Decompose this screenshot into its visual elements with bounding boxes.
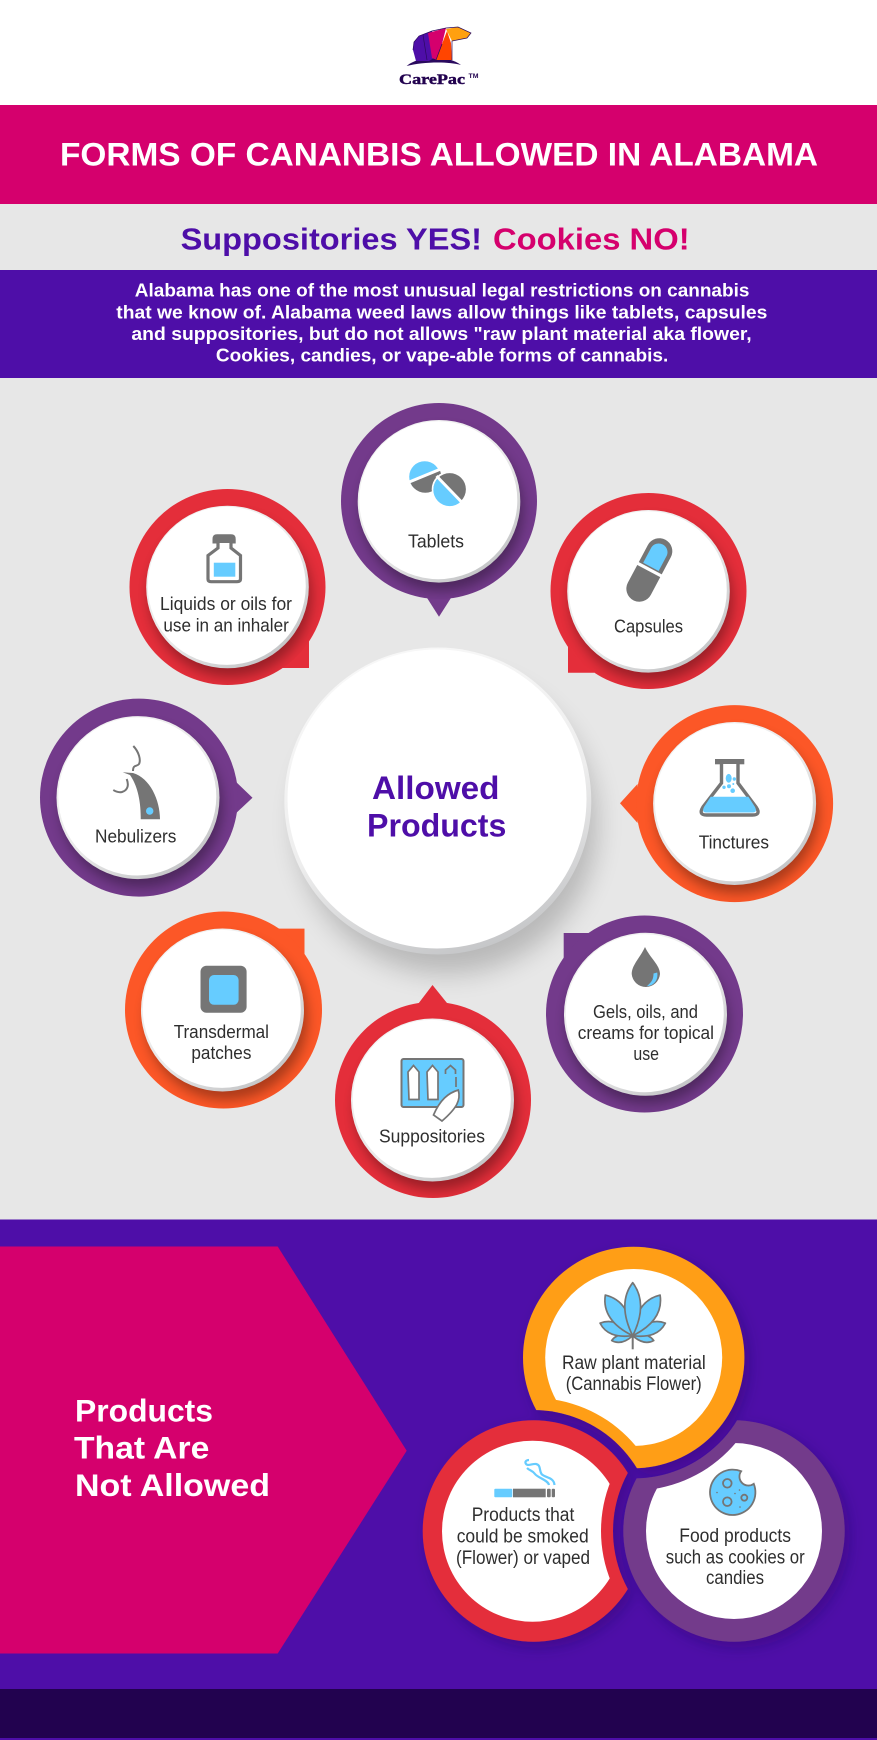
label: smoked or vaped: (Flower) or vaped <box>456 1548 590 1569</box>
label: smoked or vaped <box>456 1505 590 1569</box>
icon: bottle <box>208 534 240 582</box>
center circle: allowed products: Products <box>367 808 506 844</box>
intro paragraph: and suppositories, but do not allows "raw plant material aka flower, <box>131 323 752 344</box>
intro paragraph: that we know of. Alabama weed laws allow things like tablets, capsules <box>116 302 767 323</box>
arrow banner: products that are not allowed: Not Allowed <box>75 1467 270 1503</box>
center circle: allowed products: Allowed <box>372 770 500 806</box>
panel: allowed products background <box>0 378 877 1220</box>
badge: transdermal patches: Transdermal <box>174 1021 269 1042</box>
badge: suppositories <box>335 985 531 1198</box>
icon: cannabis leaf <box>598 1283 668 1349</box>
panel: not allowed background <box>0 1220 877 1690</box>
badge: nebulizers <box>40 699 252 897</box>
title banner <box>0 105 877 204</box>
badge: liquids or oils <box>130 489 326 685</box>
label: food products: candies <box>706 1568 764 1589</box>
icon: cookie <box>710 1470 755 1515</box>
label: raw plant material: Raw plant material <box>562 1353 706 1374</box>
badge: transdermal patches: patches <box>191 1042 251 1063</box>
badge: gels, oils, creams <box>546 916 743 1112</box>
badge: liquids or oils: use in an inhaler <box>163 615 289 636</box>
label: raw plant material <box>562 1353 706 1395</box>
badge: tinctures: Tinctures <box>699 832 769 853</box>
background: white logo band <box>0 0 877 105</box>
label: smoked or vaped: Products that <box>472 1505 575 1526</box>
circle: smoked or vaped <box>423 1420 644 1642</box>
icon: smoking cigarette <box>494 1460 555 1497</box>
badge: suppositories: Suppositories <box>379 1126 485 1146</box>
icon: patch <box>200 966 247 1013</box>
badge: nebulizers: Nebulizers <box>95 826 176 846</box>
label: raw plant material: (Cannabis Flower) <box>566 1374 702 1395</box>
subtitle band: Suppositories YES! <box>181 221 482 256</box>
label: smoked or vaped: could be smoked <box>457 1527 589 1548</box>
subtitle band: Cookies NO! <box>493 221 690 256</box>
icon: tablets <box>408 461 468 507</box>
arrow banner: products that are not allowed <box>0 1246 407 1654</box>
label: food products: Food products <box>679 1526 791 1547</box>
badge: tablets: Tablets <box>408 531 464 552</box>
arrow banner: products that are not allowed: Products <box>75 1392 213 1428</box>
logo: CarePac bear <box>399 27 478 88</box>
label: food products: such as cookies or <box>666 1547 805 1568</box>
circle: raw plant material <box>523 1247 744 1468</box>
intro paragraph: Cookies, candies, or vape-able forms of cannabis. <box>216 345 668 366</box>
badge: capsules <box>550 493 746 689</box>
circle: food products <box>623 1420 845 1642</box>
badge: tinctures <box>620 705 833 902</box>
subtitle band <box>0 204 877 270</box>
badge: gels, oils, creams: Gels, oils, and <box>593 1001 698 1022</box>
icon: suppository tray <box>402 1059 464 1121</box>
cluster: not allowed circles <box>423 1247 845 1642</box>
footer band <box>0 1689 877 1740</box>
badge: transdermal patches <box>125 912 322 1108</box>
badge: gels, oils, creams: creams for topical <box>578 1022 714 1043</box>
icon: flask <box>701 759 758 815</box>
icon: capsule <box>620 533 679 608</box>
intro paragraph <box>0 270 877 378</box>
intro paragraph: Alabama has one of the most unusual legal restrictions on cannabis <box>135 280 749 301</box>
badge: tablets <box>341 403 537 617</box>
badge: liquids or oils: Liquids or oils for <box>160 593 292 614</box>
center circle: allowed products <box>284 648 597 974</box>
badge: gels, oils, creams: use <box>633 1043 659 1064</box>
arrow banner: products that are not allowed: That Are <box>74 1430 209 1466</box>
icon: droplet <box>632 947 660 987</box>
logo: CarePac bear: CarePac <box>399 72 465 88</box>
logo: CarePac bear: TM <box>468 73 478 80</box>
label: food products <box>666 1526 805 1589</box>
title banner: FORMS OF CANANBIS ALLOWED IN ALABAMA <box>60 137 818 173</box>
badge: capsules: Capsules <box>614 616 683 637</box>
icon: nebulizer <box>113 746 160 819</box>
